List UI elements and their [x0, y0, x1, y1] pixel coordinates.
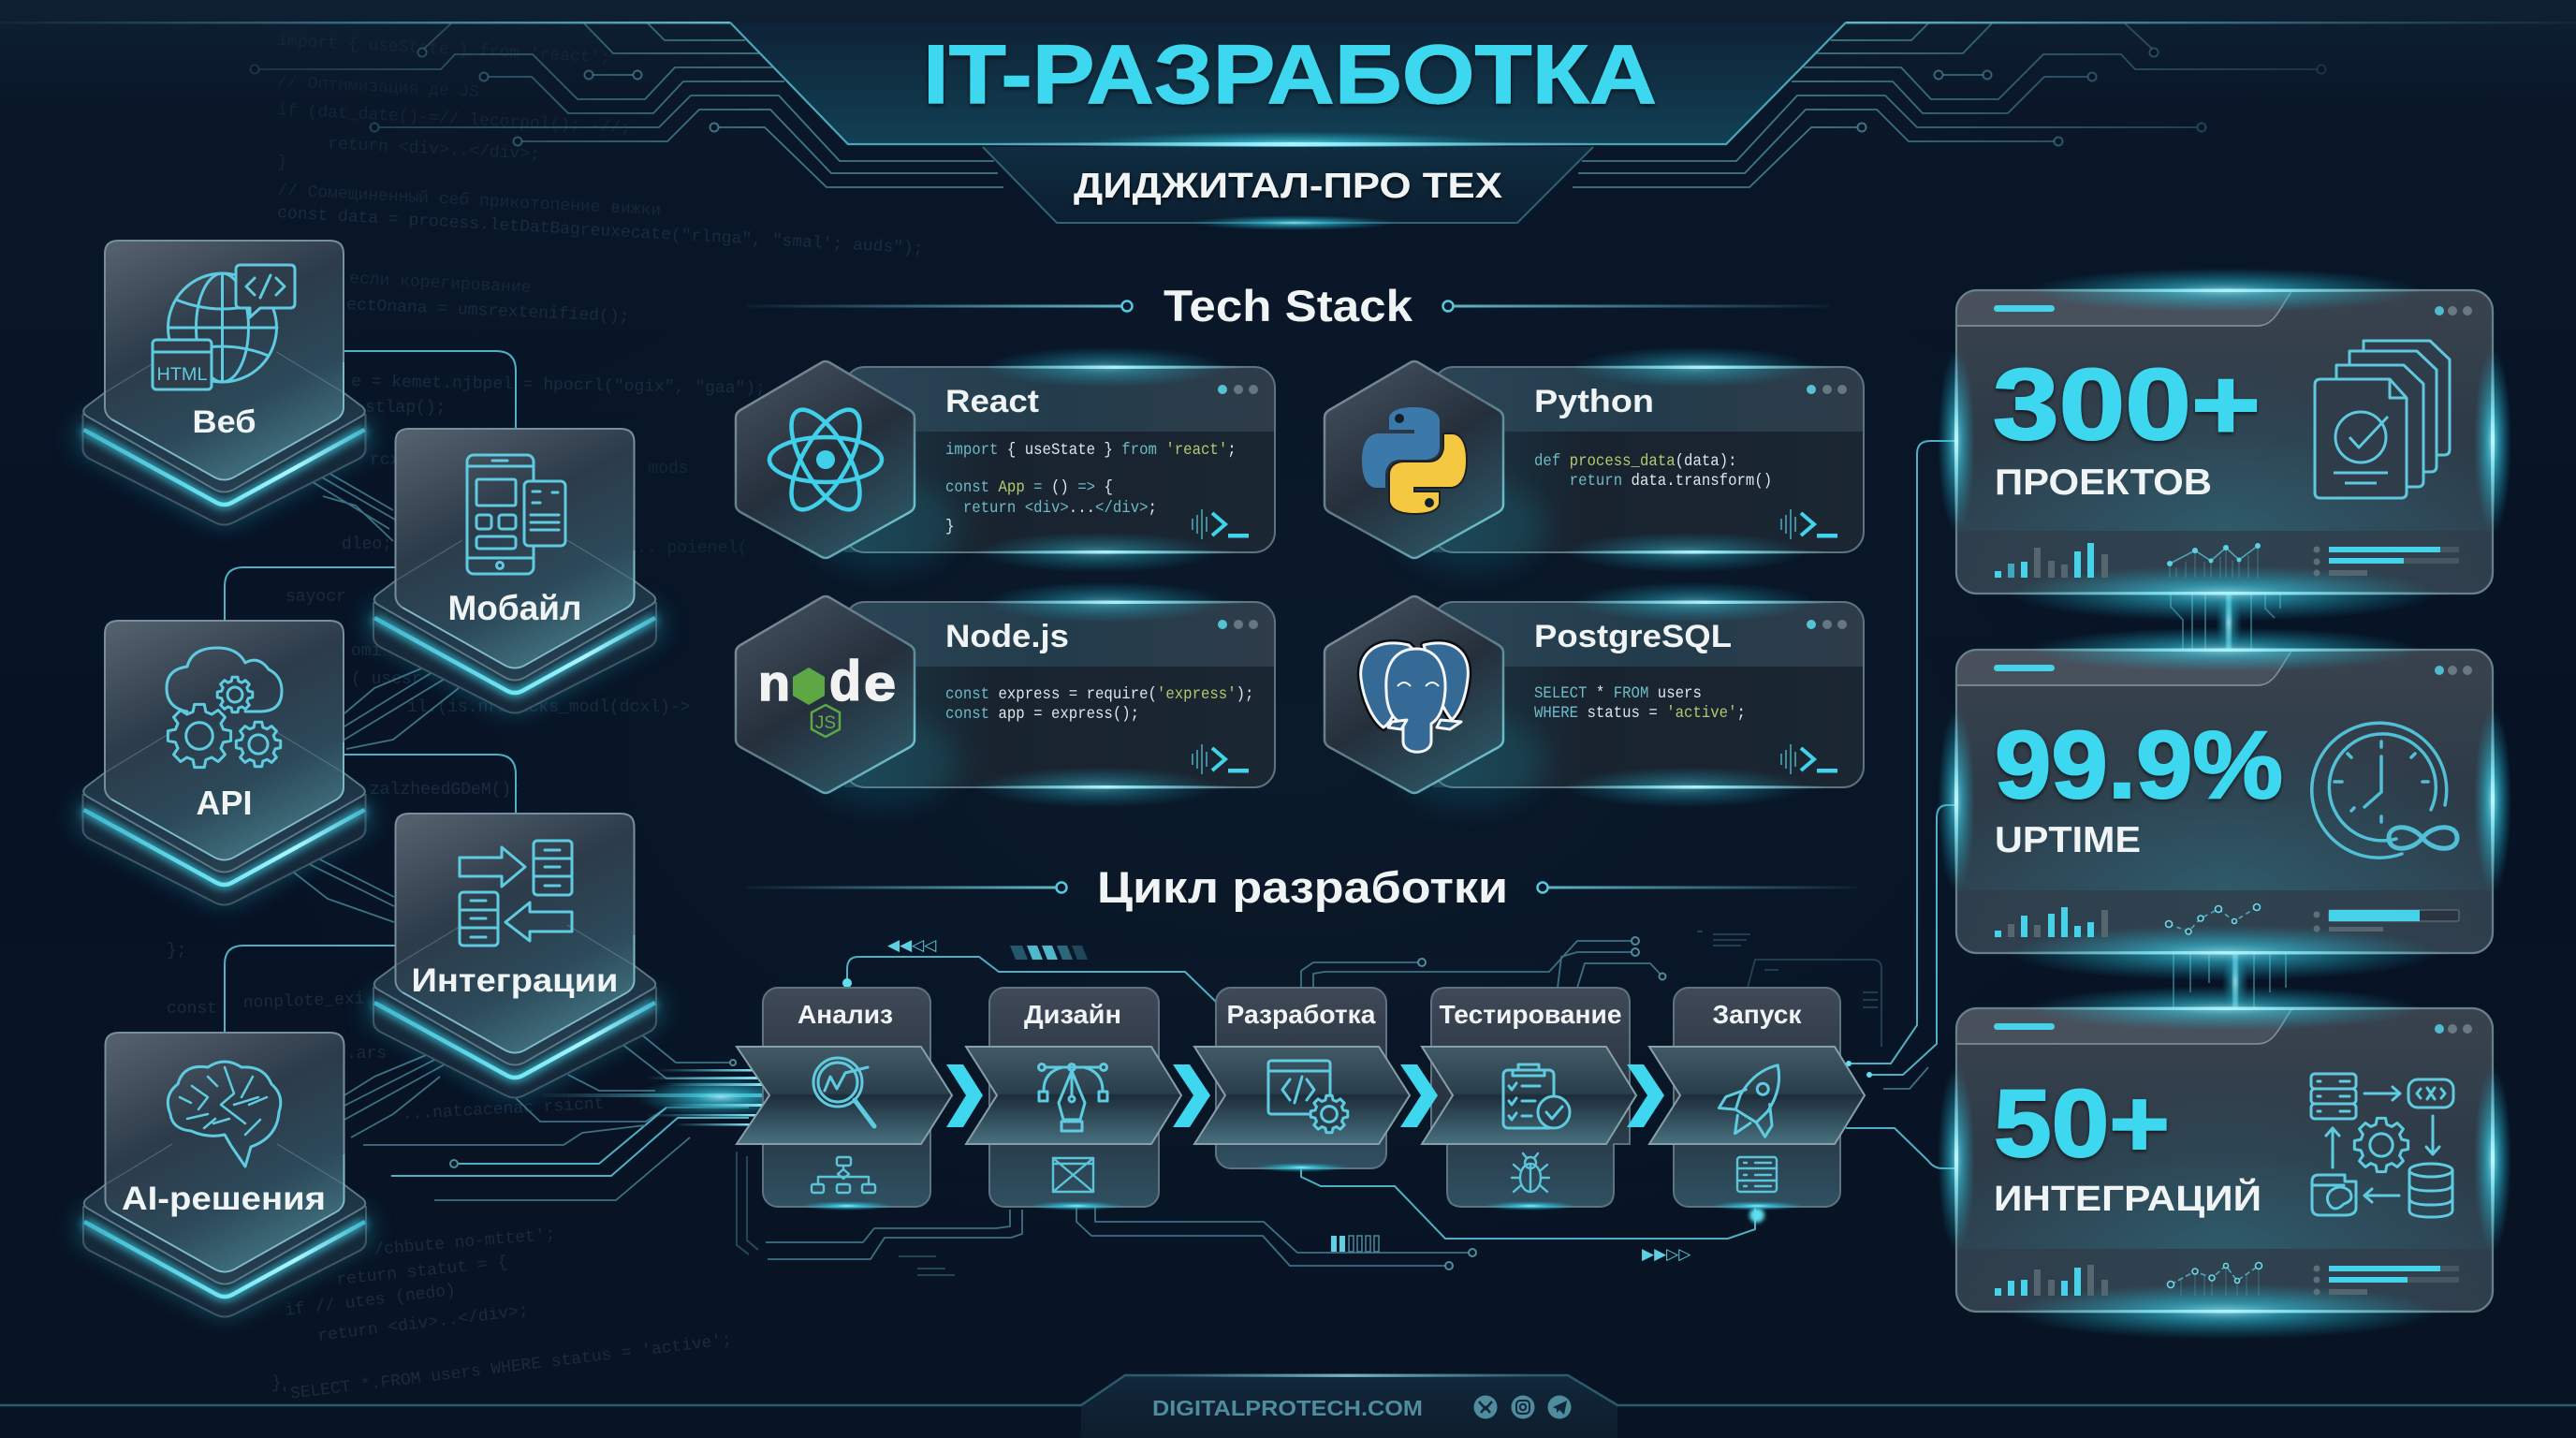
- header circuit lines left: [0, 22, 1003, 187]
- mini bar chart: [1995, 543, 2108, 578]
- background code watermark: if // utes (nedo): [284, 1282, 457, 1321]
- background code watermark: import { useState } from 'react';: [277, 32, 611, 68]
- mini line chart: [2168, 1262, 2261, 1296]
- connectors between service cards: [225, 351, 516, 1137]
- name: Python: Python: [1534, 384, 1654, 419]
- value: 300+: 300+: [1993, 347, 2261, 461]
- background code watermark: il.(is.nrblacks_modl(dcxl)->: [407, 698, 690, 717]
- icon: flowchart: [812, 1157, 875, 1193]
- background code watermark: return statut = {: [336, 1254, 508, 1290]
- code: PostgreSQL: [1534, 684, 1746, 723]
- label: Запуск: Запуск: [1713, 1000, 1802, 1029]
- label: Веб: Веб: [193, 404, 256, 440]
- tech card: Node.js: [736, 581, 1275, 808]
- label: Анализ: Анализ: [798, 1000, 893, 1029]
- icon: cloud with gears: [167, 648, 282, 768]
- subtitle banner: [983, 147, 1593, 230]
- icon: bug: [1512, 1153, 1549, 1192]
- background code watermark: const data = process.letDatBagreuxecate("rlnga", "smal'; auds");: [277, 204, 924, 259]
- label: uptime: UPTIME: [1995, 820, 2141, 860]
- heading: tech stack: [747, 281, 1829, 330]
- icon: brain: [168, 1062, 281, 1167]
- card: AI-решения: [83, 1033, 366, 1316]
- process step: Тестирование: [1422, 988, 1636, 1211]
- heading: development cycle: [747, 862, 1857, 912]
- icon: Python logo: [1362, 407, 1467, 514]
- code: Node.js: const express = require('express');: [945, 685, 1253, 704]
- mini line chart: [2166, 904, 2260, 934]
- icon: document stack: [2315, 341, 2450, 498]
- card: Мобайл: [373, 429, 656, 713]
- card: Интеграции: [373, 814, 656, 1097]
- icon: Node.js logo: e: [864, 655, 896, 712]
- card: Веб: [82, 241, 365, 524]
- icon: Node.js logo: [758, 650, 896, 737]
- subtitle: ДИДЖИТАЛ-ПРО ТЕХ: [1074, 167, 1503, 206]
- stat card: 300+ проектов: [1938, 268, 2511, 622]
- title banner: [730, 22, 1846, 157]
- footer bar: [0, 1374, 2576, 1438]
- value: 99.9%: 99.9%: [1995, 712, 2283, 818]
- background code watermark: ( usesr: [351, 670, 422, 689]
- background code watermark: }: [271, 1374, 282, 1393]
- decorative arrows and stripes: ▶▶▷▷: [1642, 1245, 1691, 1263]
- output circuit lines to stats: [1846, 441, 2286, 1168]
- circuit lines into process: [363, 1034, 805, 1200]
- code: Node.js: const app = express();: [945, 705, 1139, 724]
- name: Node.js: Node.js: [945, 619, 1069, 654]
- process step: Дизайн: [966, 988, 1181, 1211]
- background code watermark: // Сомещиненный себ прикотопение вижки: [277, 181, 662, 220]
- icon: server: [1737, 1157, 1777, 1192]
- icon: mobile phone: [467, 455, 565, 574]
- code: Node.js: [945, 685, 1253, 724]
- background code watermark: }: [277, 154, 288, 173]
- flow chevron arrows: [946, 1064, 1664, 1127]
- process step: Разработка: [1194, 988, 1410, 1172]
- background code watermark: return <div>..</div>;: [328, 135, 540, 165]
- background code watermark: если корегирование: [349, 270, 532, 298]
- background code watermark: rcx: [370, 451, 400, 470]
- icon: clipboard checklist: [1503, 1064, 1570, 1128]
- label: Мобайл: Мобайл: [447, 589, 582, 627]
- heading: development cycle: Цикл разработки: [1097, 862, 1508, 912]
- label: AI-решения: AI-решения: [122, 1181, 326, 1217]
- icon: crossed box: [1053, 1158, 1093, 1192]
- name: PostgreSQL: PostgreSQL: [1534, 619, 1732, 654]
- icon: React atom: [769, 400, 882, 520]
- icon: rocket: [1712, 1050, 1801, 1148]
- background code watermark: dleo;: [342, 536, 392, 554]
- name: React: React: [945, 384, 1039, 419]
- progress bars: [2314, 910, 2459, 932]
- heading: tech stack: Tech Stack: [1164, 281, 1413, 330]
- footer website: DIGITALPROTECH.COM: [1152, 1396, 1423, 1420]
- code: PostgreSQL: SELECT * FROM users: [1534, 684, 1702, 703]
- background code watermark: [167, 32, 924, 1405]
- code: React: <div>...</div>;: [1025, 499, 1157, 518]
- background code watermark: nonplote_exi: [243, 990, 365, 1013]
- code: Python: def process_data(data):: [1534, 452, 1737, 471]
- background code watermark: };: [167, 942, 187, 961]
- background code watermark: omi: [351, 642, 381, 661]
- icon: PostgreSQL elephant: [1361, 643, 1468, 752]
- tech card: React: [736, 346, 1275, 573]
- label: Интеграции: Интеграции: [412, 962, 618, 999]
- title: IT-РАЗРАБОТКА: [923, 27, 1657, 121]
- icon: Node.js logo: n: [758, 655, 790, 712]
- process step: Анализ: [737, 988, 952, 1211]
- icon: clock with infinity: [2312, 723, 2457, 858]
- icon: Node.js logo: JS: [815, 713, 836, 733]
- label: проектов: ПРОЕКТОВ: [1995, 462, 2212, 503]
- background code watermark: .. poienel(: [637, 539, 748, 558]
- icon: data exchange: [460, 841, 572, 946]
- background code watermark: const: [167, 1000, 217, 1019]
- card: Веб: HTML: [157, 365, 208, 385]
- background code watermark: if (dat_date()-=// lecorpol(); -//;: [277, 101, 631, 139]
- decorative arrows and stripes: ◀◀◁◁: [887, 936, 937, 954]
- code: React: import { useState } from 'react';: [945, 441, 1237, 460]
- footer social icons: [1473, 1395, 1571, 1419]
- icon: globe with code: [153, 265, 295, 389]
- mini bar chart: [1995, 907, 2108, 937]
- card: API: [82, 621, 365, 904]
- background code watermark: ...natcacenac rsicnt: [402, 1095, 605, 1124]
- code: Python: [1534, 452, 1772, 491]
- icon: magnifier: [813, 1058, 874, 1126]
- background code watermark: 'SELECT *.FROM users WHERE status = 'active';: [279, 1331, 733, 1405]
- code: Python: data.transform(): [1632, 472, 1772, 491]
- stat card: 50+ интеграций: [1938, 986, 2511, 1340]
- code: Python: return: [1570, 472, 1622, 491]
- progress bars: [2314, 547, 2459, 577]
- progress bars: [2314, 1266, 2459, 1296]
- background code watermark: /chbute no-mttet';: [373, 1225, 556, 1260]
- code: React: }: [945, 518, 954, 536]
- label: Тестирование: Тестирование: [1440, 1000, 1621, 1029]
- code: React: [945, 441, 1237, 536]
- background code watermark: zalzheedGDeM();: [370, 781, 521, 800]
- process circuit lines: [737, 932, 1881, 1275]
- decorative arrows and stripes: [887, 936, 1691, 1263]
- value: 50+: 50+: [1994, 1070, 2170, 1177]
- icon: pen tool: [1039, 1064, 1107, 1131]
- label: Дизайн: Дизайн: [1024, 1000, 1121, 1029]
- mini line chart: [2167, 543, 2261, 578]
- background code watermark: return <div>..</div>;: [316, 1301, 530, 1346]
- label: Разработка: Разработка: [1226, 1000, 1376, 1029]
- code: PostgreSQL: WHERE status = 'active';: [1534, 704, 1746, 723]
- label: API: API: [197, 784, 253, 822]
- mini bar chart: [1995, 1265, 2108, 1296]
- background code watermark: sayocr: [285, 588, 346, 607]
- tech card: PostgreSQL: [1325, 581, 1864, 808]
- icon: Node.js logo: d: [829, 650, 861, 712]
- background code watermark: ectOnana = umsrextenified();: [346, 296, 630, 327]
- background code watermark: .. mods: [618, 460, 689, 478]
- tech card: Python: [1325, 346, 1864, 573]
- background code watermark: // Оптимизация де JS: [277, 73, 479, 102]
- background code watermark: .ars: [346, 1045, 387, 1064]
- icon: code window with gear: [1268, 1061, 1348, 1133]
- icon: integration cycle: [2311, 1074, 2453, 1217]
- stat card: 99.9% uptime: [1938, 627, 2511, 981]
- background code watermark: stlap();: [365, 399, 446, 418]
- code: React: return: [963, 499, 1016, 518]
- background code watermark: e = kemet.njbpel = hpocrl("ogix", "gaa");: [351, 373, 766, 399]
- label: интеграций: ИНТЕГРАЦИЙ: [1994, 1177, 2261, 1219]
- header circuit lines right: [1573, 22, 2576, 187]
- process step: Запуск: [1649, 988, 1865, 1211]
- code: React: const App = () => {: [945, 478, 1113, 497]
